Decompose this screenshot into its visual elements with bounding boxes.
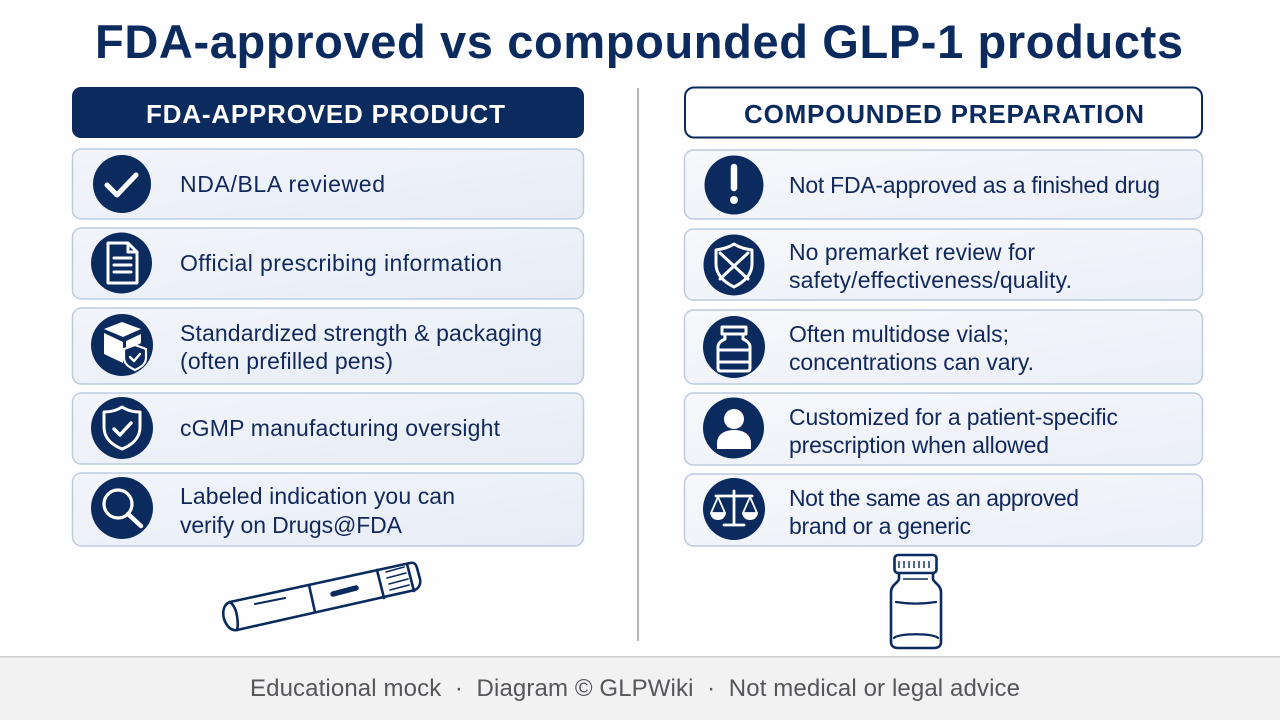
icon: vial xyxy=(891,555,941,648)
row: standardized strength and packaging xyxy=(72,308,584,384)
row: labeled indication: verify on Drugs@FDA xyxy=(180,512,403,538)
row: multidose vials: concentrations can vary. xyxy=(789,349,1034,375)
row: multidose vials xyxy=(684,310,1202,384)
heading: compounded preparation xyxy=(685,88,1202,138)
row: standardized strength and packaging: (often prefilled pens) xyxy=(180,348,393,374)
row: not FDA-approved xyxy=(684,150,1202,219)
footer xyxy=(0,656,1280,720)
row: customized prescription: Customized for a patient-specific xyxy=(789,404,1118,430)
row: not FDA-approved: Not FDA-approved as a finished drug xyxy=(789,172,1160,198)
panel: FDA-approved product xyxy=(72,87,584,630)
panel: compounded preparation xyxy=(684,88,1202,648)
row: labeled indication: Labeled indication you can xyxy=(180,483,455,509)
title: FDA-approved vs compounded GLP-1 products xyxy=(95,15,1183,68)
row: no premarket review xyxy=(684,229,1202,300)
row: labeled indication xyxy=(72,473,584,546)
heading: compounded preparation: COMPOUNDED PREPARATION xyxy=(744,99,1144,129)
row: not the same as approved brand xyxy=(684,474,1202,546)
heading: FDA-approved product: FDA-APPROVED PRODUCT xyxy=(146,99,505,129)
row: cGMP manufacturing oversight xyxy=(72,393,584,464)
divider between columns xyxy=(637,88,639,641)
row: standardized strength and packaging: Standardized strength & packaging xyxy=(180,320,542,346)
row: customized prescription xyxy=(684,393,1202,465)
row: multidose vials: Often multidose vials; xyxy=(789,321,1009,347)
heading: FDA-approved product xyxy=(72,87,584,138)
row: no premarket review: No premarket review for xyxy=(789,239,1035,265)
row: no premarket review: safety/effectiveness/quality. xyxy=(789,267,1072,293)
row: official prescribing information xyxy=(72,228,584,299)
row: NDA/BLA reviewed: NDA/BLA reviewed xyxy=(180,171,385,197)
row: customized prescription: prescription when allowed xyxy=(789,432,1049,458)
row: official prescribing information: Official prescribing information xyxy=(180,250,502,276)
footer: Educational mock · Diagram © GLPWiki · Not medical or legal advice xyxy=(250,675,1020,702)
row: cGMP manufacturing oversight: cGMP manufacturing oversight xyxy=(180,415,501,441)
row: not the same as approved brand: brand or a generic xyxy=(789,513,971,539)
row: NDA/BLA reviewed xyxy=(72,149,584,219)
row: not the same as approved brand: Not the same as an approved xyxy=(789,485,1079,511)
icon: injector pen xyxy=(223,563,420,630)
